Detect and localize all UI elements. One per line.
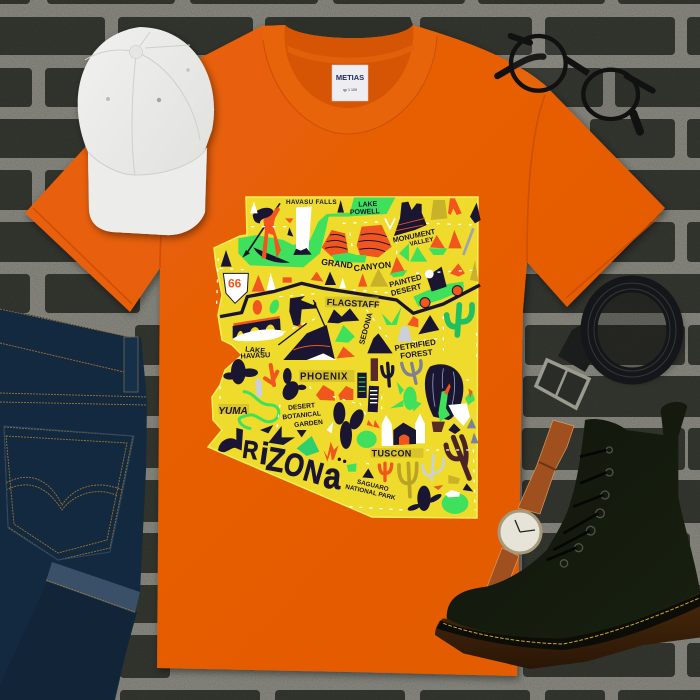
north labels: GRAND [321,257,353,271]
north labels: HAVASU [240,350,271,361]
south part illustrations [218,358,479,514]
boot sole [435,590,700,669]
north labels: HAVASU FALLS [286,199,337,206]
green truck [413,267,464,308]
jeans belt loop [124,337,138,392]
green lake and stream [238,197,395,267]
small dark and grey cacti [382,361,421,386]
route line road [220,283,480,317]
north labels: LAKE [358,201,378,209]
north labels: PETRIFIED [394,338,437,353]
map yellow shape [208,197,478,518]
north labels: LAKE [245,344,266,355]
rectangle towers [357,358,379,412]
neck label: METIAS [336,73,364,82]
dark maroon saguaro [446,437,469,478]
bottom prickly pear [407,486,443,512]
arizona title: N [300,453,327,492]
plants center [260,420,380,462]
dark prickly pear [279,368,306,403]
arizona title: i [258,437,271,471]
saguaro national park label: NATIONAL PARK [345,483,397,502]
boot welt [437,591,700,650]
arizona title: O [280,446,308,486]
large dark barrel cactus [425,364,479,443]
arizona title: a [322,455,344,498]
prickly pear west [223,359,258,384]
waterfall [293,207,312,255]
north labels: DESERT [390,282,423,298]
pine trees [221,200,388,292]
yuma snake [239,392,279,428]
north labels: PAINTED [388,272,423,289]
grand canyon rocks [322,225,392,257]
white baseball cap [78,27,214,235]
neck opening showing wall [285,17,413,38]
scattered white dashes north [217,222,477,357]
neck label [332,65,368,101]
wristwatch [487,420,574,587]
desert botanical garden label [282,402,323,429]
paddle boarder [242,203,290,263]
jeans lower leg [0,582,137,700]
north labels: POWELL [350,208,381,216]
peak and cloud [283,325,337,360]
flagstaff label: FLAGSTAFF [327,297,380,310]
desert botanical garden label: DESERT [288,402,315,412]
green cactus group [390,382,422,412]
desert botanical garden label: BOTANICAL [282,410,321,421]
belt buckle [536,360,589,408]
arizona title: Z [264,440,288,480]
denim jeans [0,308,147,700]
decorative desert objects [385,198,481,282]
sedona label: SEDONA [357,311,375,346]
lake havasu bridge [233,316,284,341]
north labels: FOREST [400,348,433,361]
north part illustrations [217,197,481,361]
grand canyon meadow [332,253,367,263]
north labels: CANYON [353,259,392,273]
small desert accents [347,463,473,492]
monument valley rocks [394,202,427,236]
yuma label: YUMA [218,406,248,417]
route 66 sign: 66 [228,276,242,290]
Arizona map print [208,197,481,518]
scattered white dashes south [220,380,477,510]
boot laces and eyelets [547,447,613,567]
orange cactus and grey cactus [258,365,277,394]
desert botanical garden label: GARDEN [294,419,323,429]
jeans stitching [0,309,147,612]
north labels: VALLEY [409,236,435,248]
sleeve seams [33,95,660,304]
large green saguaro [447,305,472,335]
arizona title: R [241,435,260,465]
tucson mission [382,413,425,446]
phoenix orange rocks [316,385,353,401]
tucson label: TUSCON [372,449,412,459]
saguaro national park label: SAGUARO [356,478,389,493]
phoenix label: PHOENIX [300,371,348,382]
southern cacti [379,455,444,497]
black leather belt [536,283,685,408]
flagstaff rocks [327,308,359,323]
arizona title [218,428,346,498]
sedona rocks [335,325,393,358]
jeans cuff [46,562,140,613]
north labels [240,199,437,361]
central prickly pear [333,402,367,449]
route 66 sign [223,273,248,303]
north labels: MONUMENT [392,227,436,245]
black lace-up boot [435,402,700,669]
neck label: qp 1 109 [343,88,357,92]
boot welt stitching [443,595,700,644]
petrified forest rocks [397,315,439,342]
collar [262,25,437,134]
green and orange leaf shapes [253,218,402,325]
hiker [278,296,325,345]
green barrel cactus [442,490,468,514]
boot upper [447,402,700,638]
eyeglasses [497,36,653,132]
